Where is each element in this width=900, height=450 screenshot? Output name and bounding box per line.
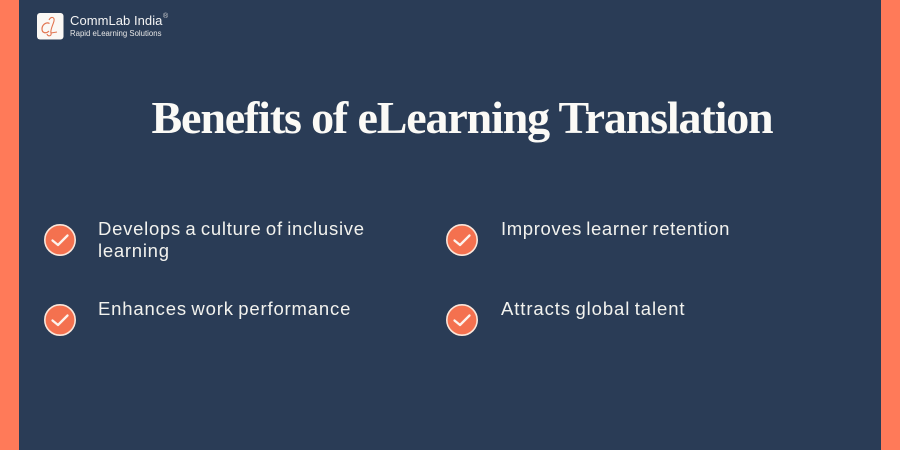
logo tagline: Rapid eLearning Solutions: [70, 29, 161, 38]
benefit text: Enhances work performance: [98, 298, 351, 319]
benefit text: [98, 218, 365, 261]
logo registered mark: ®: [163, 13, 168, 20]
left orange border: [0, 0, 19, 450]
benefit text: Attracts global talent: [501, 298, 685, 319]
benefit text: Develops a culture of inclusive: [98, 218, 365, 239]
title: Benefits of eLearning Translation: [152, 92, 772, 143]
benefit: learner retention: [446, 218, 730, 256]
icon: logo badge: [37, 13, 64, 40]
right orange border: [881, 0, 900, 450]
icon: check: [446, 224, 478, 256]
benefit: work performance: [44, 298, 351, 336]
benefit: global talent: [446, 298, 685, 336]
icon: check: [44, 304, 76, 336]
benefit: inclusive learning: [44, 218, 365, 261]
logo: [37, 12, 168, 40]
icon: check: [44, 224, 76, 256]
benefit text: learning: [98, 240, 170, 261]
logo name: CommLab India: [70, 13, 162, 28]
benefit text: Improves learner retention: [501, 218, 730, 239]
icon: check: [446, 304, 478, 336]
